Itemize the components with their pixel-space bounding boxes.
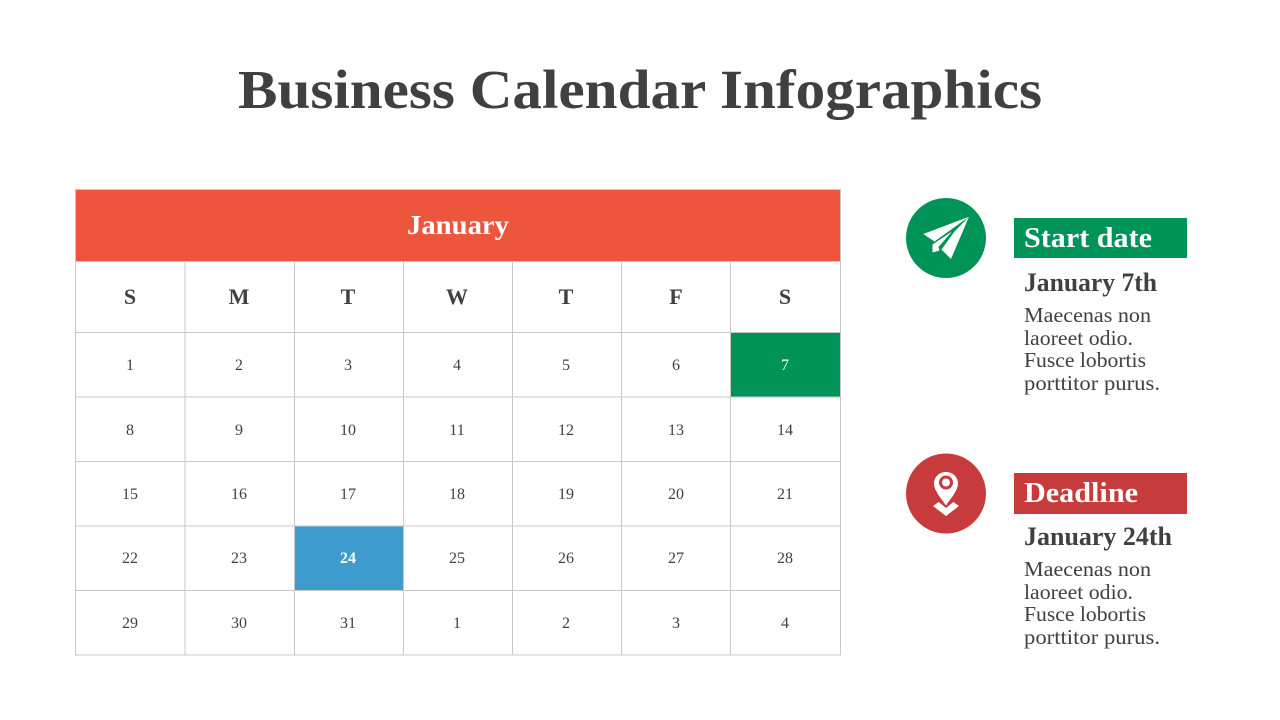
day numbers [122,357,793,632]
day numbers: 7 [781,357,789,374]
weekday row: S [779,284,791,309]
highlighted day: deadline cell [294,526,404,590]
day numbers: 30 [231,615,247,632]
weekday row: T [341,284,356,309]
day numbers: 23 [231,550,247,567]
day numbers: 8 [126,422,134,439]
start date description: Fusce lobortis [1024,348,1146,372]
start date value: January 7th [1024,268,1158,297]
weekday row: W [446,284,468,309]
deadline value: January 24th [1024,522,1173,551]
day numbers: 2 [235,357,243,374]
day numbers: 28 [777,550,793,567]
start date description: Maecenas non [1024,303,1152,327]
weekday row: S [124,284,136,309]
day numbers: 11 [449,422,465,439]
weekday row: M [229,284,250,309]
day numbers: 9 [235,422,243,439]
start date description: laoreet odio. [1024,326,1133,350]
day numbers: 22 [122,550,138,567]
deadline description: Fusce lobortis [1024,602,1146,626]
day numbers: 1 [126,357,134,374]
deadline description: laoreet odio. [1024,580,1133,604]
day numbers: 2 [562,615,570,632]
day numbers: 6 [672,357,680,374]
day numbers: 4 [453,357,461,374]
weekday row: F [669,284,683,309]
day numbers: 20 [668,486,684,503]
month header [76,190,840,262]
day numbers: 14 [777,422,793,439]
start date description [1024,303,1160,395]
day numbers: 3 [672,615,680,632]
start date label [1014,218,1187,258]
day numbers: 24 [340,550,356,567]
highlighted day: start date cell [731,333,840,397]
day numbers: 17 [340,486,356,503]
day numbers: 25 [449,550,465,567]
day numbers: 10 [340,422,356,439]
panel: calendar [76,190,840,655]
day numbers: 21 [777,486,793,503]
day numbers: 12 [558,422,574,439]
weekday row: T [559,284,574,309]
deadline description: Maecenas non [1024,557,1152,581]
day numbers: 16 [231,486,247,503]
day numbers: 29 [122,615,138,632]
day numbers: 31 [340,615,356,632]
day numbers: 27 [668,550,684,567]
day numbers: 15 [122,486,138,503]
icon: paper plane [906,198,986,278]
month header: January [407,210,510,240]
icon: map pin [906,454,986,534]
day numbers: 13 [668,422,684,439]
panel: start date [1014,218,1187,395]
deadline label: Deadline [1024,477,1138,509]
title: Business Calendar Infographics [238,59,1042,120]
day numbers: 5 [562,357,570,374]
panel: deadline [1014,473,1187,649]
day numbers: 19 [558,486,574,503]
start date label: Start date [1024,222,1152,254]
day numbers: 26 [558,550,574,567]
day numbers: 1 [453,615,461,632]
start date description: porttitor purus. [1024,371,1160,395]
day numbers: 18 [449,486,465,503]
deadline label [1014,473,1187,514]
deadline description [1024,557,1160,649]
weekday row [124,284,791,309]
day numbers: 4 [781,615,789,632]
day numbers: 3 [344,357,352,374]
deadline description: porttitor purus. [1024,625,1160,649]
